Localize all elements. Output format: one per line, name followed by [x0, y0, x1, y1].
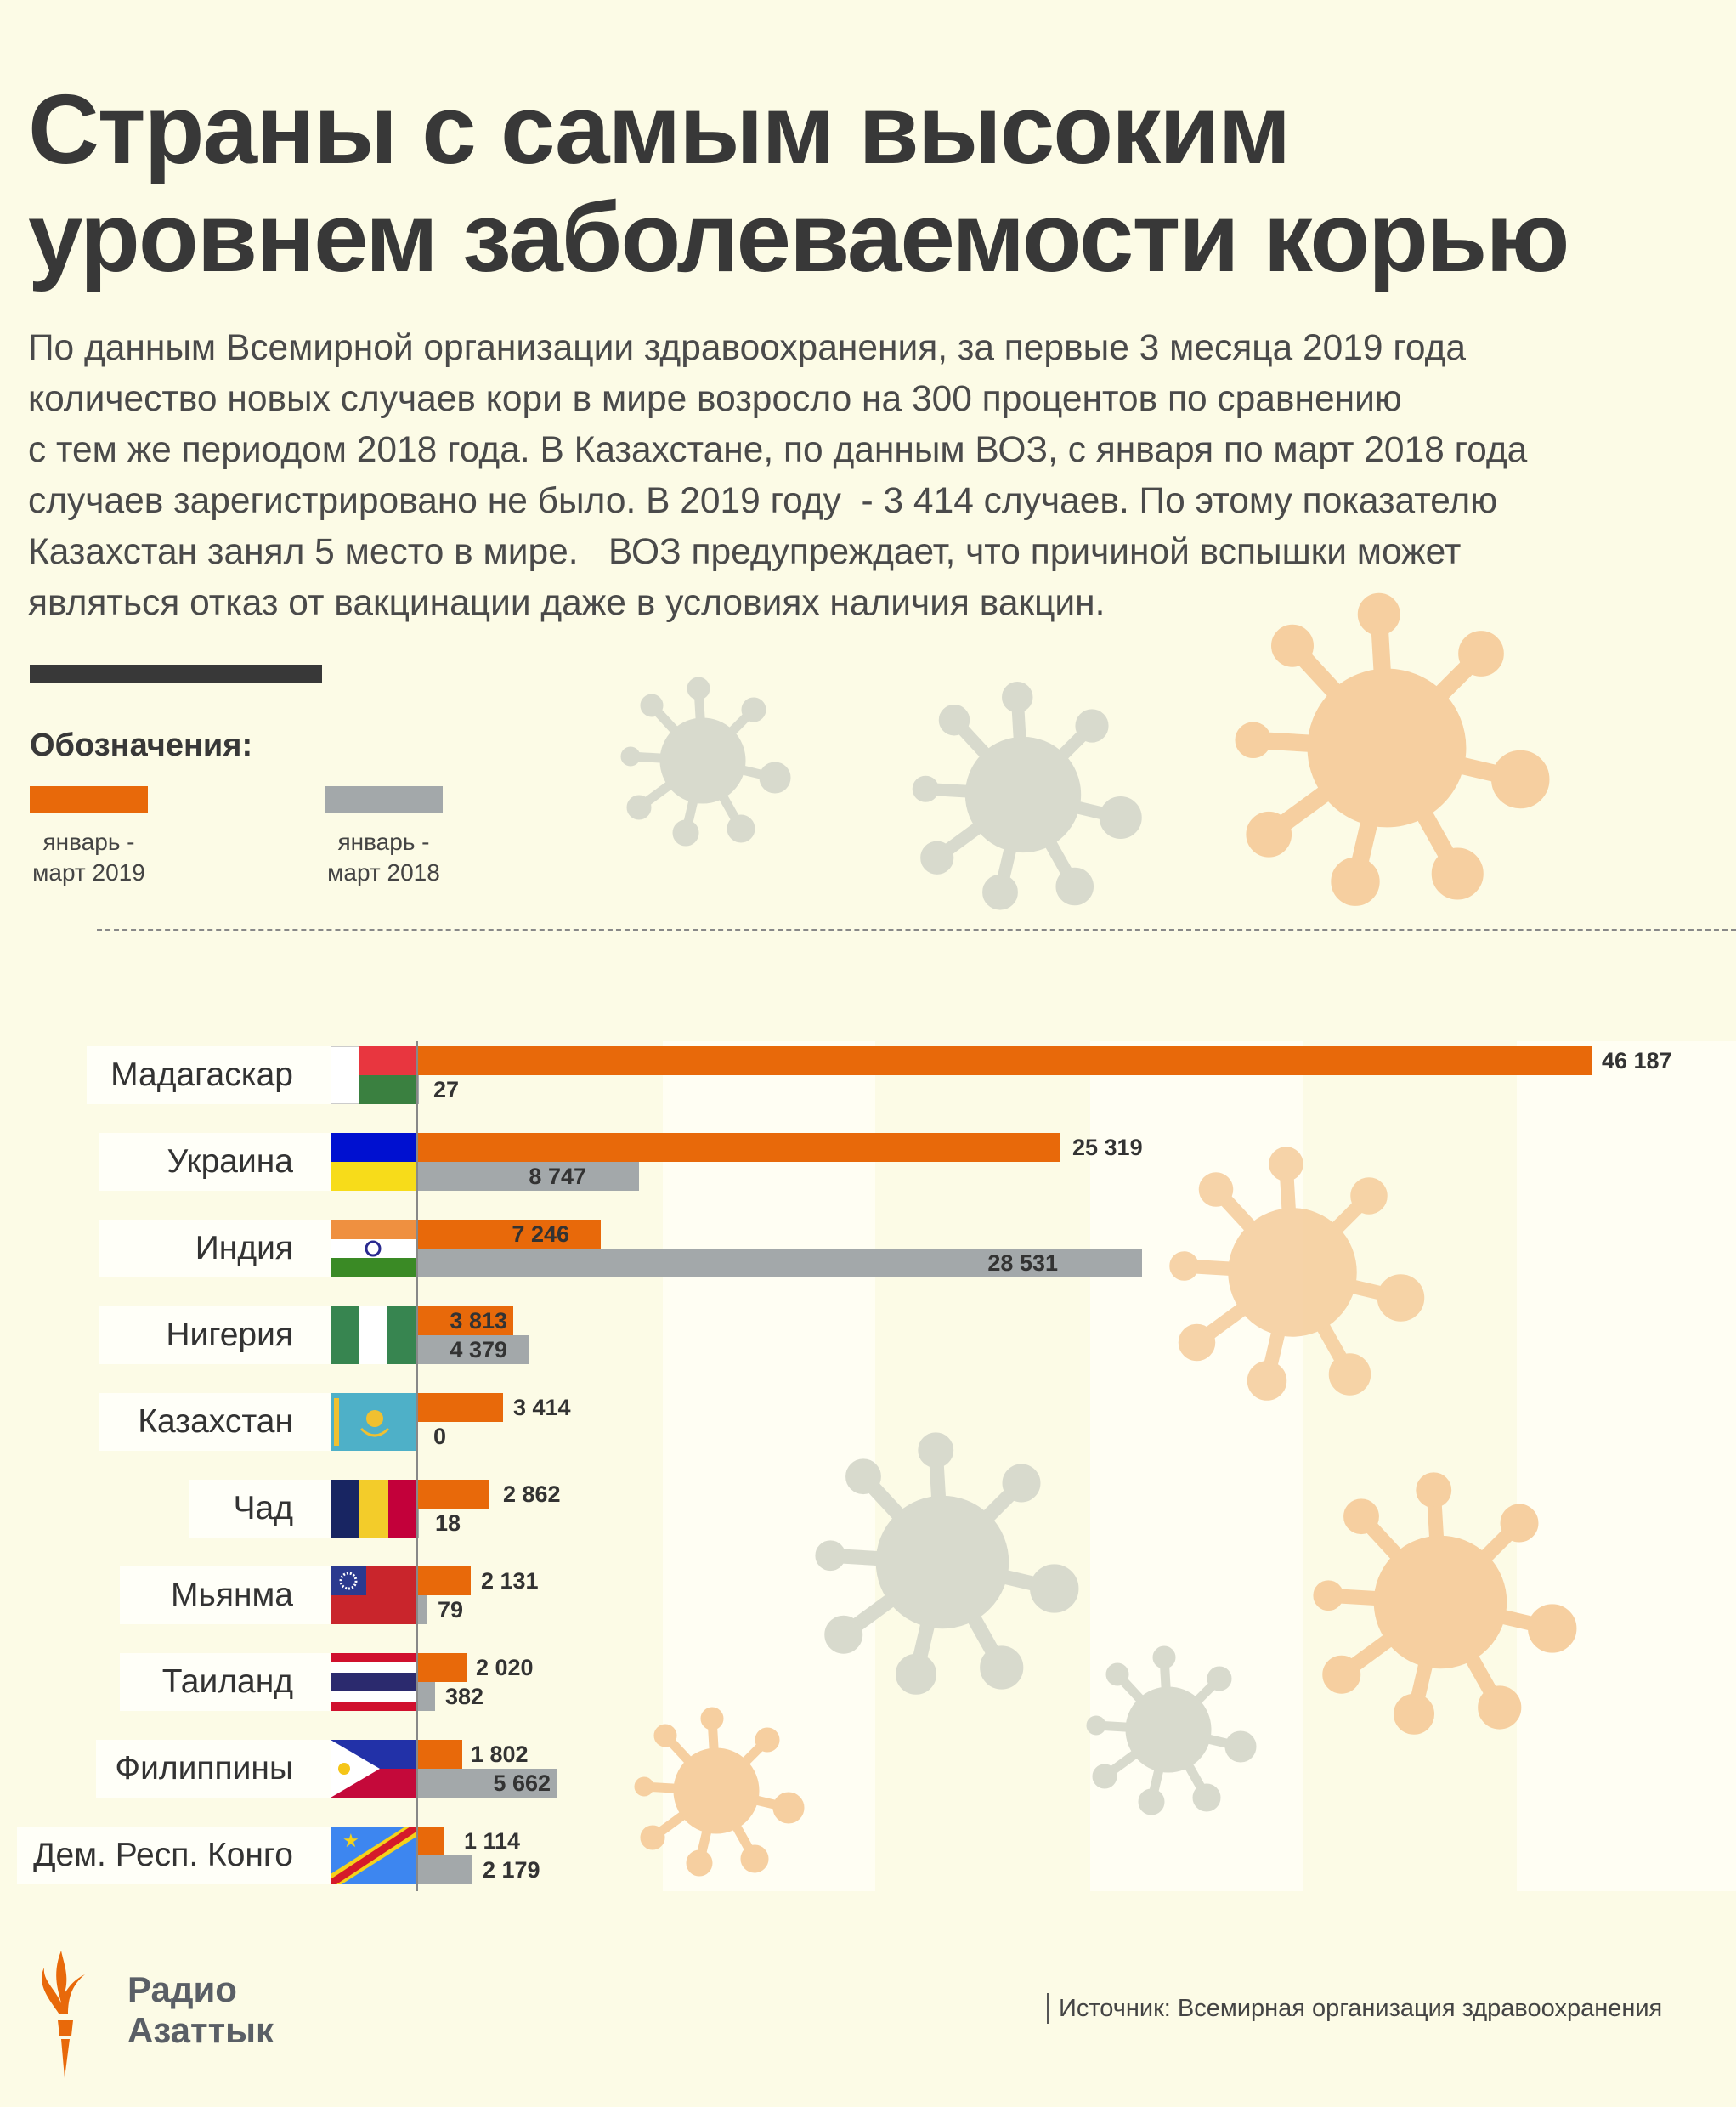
row: Thailand: Таиланд: [162, 1663, 293, 1700]
icon: virus orange chart: [1170, 1147, 1424, 1400]
icon: virus gray medium: [913, 683, 1141, 909]
legend item: 2019: январь -: [42, 829, 135, 855]
legend item: 2018: [325, 786, 443, 886]
row: Ukraine: 8 747: [529, 1164, 586, 1189]
intro paragraph: [28, 328, 1528, 623]
legend: [30, 728, 443, 886]
row: Chad: 18: [435, 1510, 461, 1536]
row: Ukraine: 25 319: [1072, 1135, 1143, 1160]
logo: [42, 1951, 274, 2078]
legend item: 2019: март 2019: [32, 859, 145, 886]
row: DR Congo: Дем. Респ. Конго: [33, 1837, 293, 1873]
icon: virus gray chart: [816, 1433, 1078, 1694]
row: Nigeria: Нигерия: [166, 1317, 293, 1353]
row: India: Индия: [195, 1230, 293, 1266]
row: Kazakhstan: [99, 1393, 571, 1451]
title: [28, 74, 1568, 292]
row: Thailand: [120, 1653, 534, 1711]
row: Thailand: 2 020: [476, 1655, 534, 1680]
row: Ukraine: Украина: [167, 1143, 293, 1180]
row: India: 7 246: [512, 1221, 569, 1247]
row: Chad: [189, 1480, 561, 1538]
icon: virus orange right: [1314, 1473, 1576, 1734]
row: Thailand: 382: [445, 1684, 483, 1709]
intro paragraph: являться отказ от вакцинации даже в условиях наличия вакцин.: [28, 583, 1105, 623]
logo: Радио: [127, 1969, 237, 2009]
row: Philippines: Филиппины: [115, 1750, 293, 1787]
row: Kazakhstan: Казахстан: [138, 1403, 293, 1440]
row: Madagascar: 46 187: [1602, 1048, 1672, 1073]
title: Страны с самым высоким: [28, 74, 1289, 184]
icon: virus orange large: [1236, 594, 1549, 905]
intro paragraph: Казахстан занял 5 место в мире. ВОЗ предупреждает, что причиной вспышки может: [28, 532, 1461, 572]
row: India: 28 531: [987, 1250, 1058, 1276]
axis line: [416, 1041, 418, 1891]
row: DR Congo: [17, 1827, 540, 1884]
intro paragraph: с тем же периодом 2018 года. В Казахстане, по данным ВОЗ, с января по март 2018 года: [28, 430, 1527, 470]
bar chart: [17, 1041, 1672, 1891]
row: Ukraine: [99, 1133, 1143, 1191]
legend item: 2018: январь -: [337, 829, 430, 855]
row: DR Congo: 2 179: [483, 1857, 540, 1883]
logo: Азаттык: [127, 2010, 274, 2050]
legend item: 2018: март 2018: [327, 859, 440, 886]
source: Источник: Всемирная организация здравоохранения: [1059, 1995, 1662, 2022]
row: DR Congo: ★: [342, 1830, 359, 1851]
row: Chad: Чад: [234, 1490, 293, 1526]
row: Myanmar: 2 131: [481, 1568, 539, 1594]
legend heading: Обозначения:: [30, 728, 252, 763]
row: Nigeria: 3 813: [450, 1308, 507, 1334]
title: уровнем заболеваемости корью: [28, 182, 1568, 292]
icon: virus gray lower: [1087, 1646, 1256, 1815]
row: Kazakhstan: 3 414: [513, 1395, 571, 1420]
row: Nigeria: [99, 1306, 529, 1364]
row: Myanmar: [120, 1566, 539, 1624]
row: Myanmar: 79: [438, 1597, 463, 1623]
row: Philippines: [96, 1740, 557, 1798]
intro paragraph: случаев зарегистрировано не было. В 2019 году - 3 414 случаев. По этому показателю: [28, 481, 1497, 521]
row: Madagascar: 27: [433, 1077, 459, 1102]
row: Nigeria: 4 379: [450, 1337, 507, 1362]
row: Myanmar: Мьянма: [171, 1577, 293, 1613]
intro paragraph: По данным Всемирной организации здравоохранения, за первые 3 месяца 2019 года: [28, 328, 1466, 368]
row: Philippines: 1 802: [471, 1742, 529, 1767]
row: Madagascar: Мадагаскар: [110, 1056, 293, 1093]
intro paragraph: количество новых случаев кори в мире возросло на 300 процентов по сравнению: [28, 379, 1402, 419]
row: Kazakhstan: 0: [433, 1424, 446, 1449]
row: Chad: 2 862: [503, 1481, 561, 1507]
icon: virus orange lower: [635, 1708, 804, 1876]
row: India: [99, 1220, 1142, 1277]
row: DR Congo: 1 114: [464, 1828, 520, 1854]
row: Madagascar: [87, 1046, 1672, 1104]
legend item: 2019: [30, 786, 148, 886]
row: Philippines: 5 662: [493, 1770, 551, 1796]
icon: virus gray small: [621, 677, 790, 846]
